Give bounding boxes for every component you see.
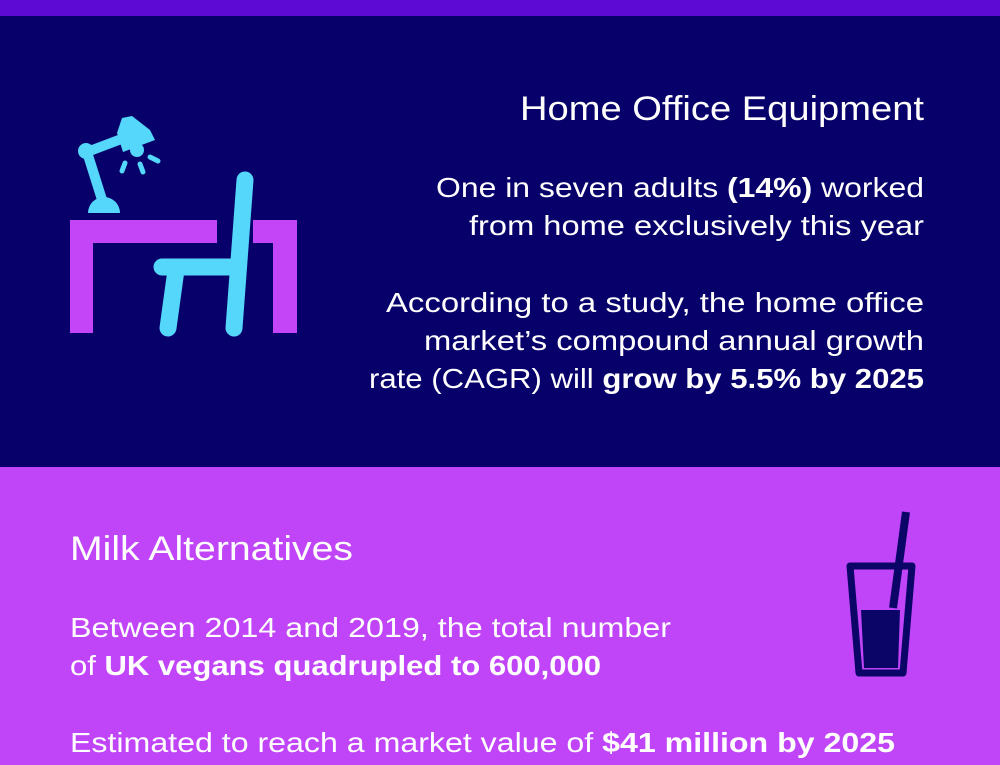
text block: CAGR: According to a study, the home office	[386, 287, 924, 318]
top strip	[0, 0, 1000, 16]
heading: Milk Alternatives: Milk Alternatives	[70, 530, 353, 568]
icon: glass with straw	[850, 512, 912, 673]
heading: Home Office Equipment: Home Office Equipment	[520, 90, 925, 128]
text block: one in seven	[436, 172, 924, 241]
text block: one in seven: One in seven adults (14%) worked	[436, 172, 924, 203]
icon: desk and lamp	[70, 116, 297, 333]
text block: CAGR: market’s compound annual growth	[424, 325, 924, 356]
text block: market value: Estimated to reach a market value of $41 million by 2025	[70, 727, 895, 758]
panel: home office	[0, 16, 1000, 467]
text block: CAGR	[369, 287, 924, 394]
text block: vegans	[70, 612, 671, 681]
text block: one in seven: from home exclusively this year	[469, 210, 924, 241]
text block: CAGR: rate (CAGR) will grow by 5.5% by 2025	[369, 363, 924, 394]
text block: vegans: Between 2014 and 2019, the total number	[70, 612, 671, 643]
text block: vegans: of UK vegans quadrupled to 600,000	[70, 650, 601, 681]
panel: milk alternatives	[0, 467, 1000, 765]
